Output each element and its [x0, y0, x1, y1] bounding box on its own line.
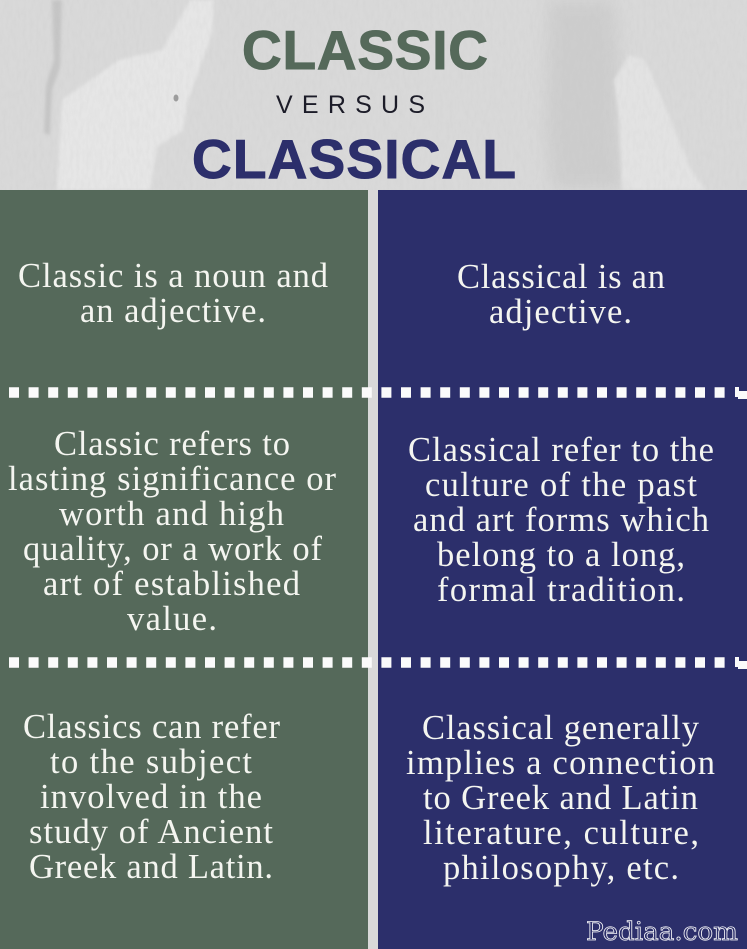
text: classics subject: Classics can refer — [23, 708, 280, 746]
text: classical meaning: formal tradition. — [437, 571, 685, 609]
text: classics subject — [23, 708, 280, 886]
text: classics subject: to the subject — [50, 743, 252, 781]
panel: classical column — [378, 190, 747, 949]
text: classical connection: philosophy, etc. — [443, 849, 679, 887]
text: classical meaning: and art forms which — [413, 501, 709, 539]
subtitle: VERSUS: VERSUS — [276, 91, 425, 119]
title: CLASSIC: CLASSIC — [242, 19, 488, 81]
text: classical connection: literature, culture, — [423, 814, 699, 852]
text: classic meaning: worth and high — [59, 495, 284, 533]
text: classical meaning: culture of the past — [425, 466, 697, 504]
text: classic meaning: value. — [127, 600, 217, 638]
text: classic part of speech: Classic is a noun and — [18, 257, 328, 295]
text: classical connection: Classical generally — [422, 709, 700, 747]
text: classical connection — [406, 709, 715, 887]
text: classical meaning: Classical refer to the — [408, 431, 714, 469]
text: classical meaning: belong to a long, — [437, 536, 685, 574]
text: classical connection: to Greek and Latin — [423, 779, 698, 817]
text: classic part of speech: an adjective. — [80, 292, 266, 330]
text: classic meaning: Classic refers to — [54, 425, 290, 463]
text: classics subject: involved in the — [40, 778, 262, 816]
divider: dotted row two — [9, 657, 747, 669]
text: classics subject: Greek and Latin. — [29, 848, 273, 886]
text: classic meaning: art of established — [43, 565, 300, 603]
watermark: Pediaa.com: Pediaa.com — [586, 917, 738, 946]
text: classics subject: study of Ancient — [29, 813, 273, 851]
text: classical meaning — [408, 431, 714, 609]
text: classical part of speech: adjective. — [489, 293, 632, 331]
text: classical connection: implies a connection — [406, 744, 715, 782]
title: CLASSICAL: CLASSICAL — [192, 128, 516, 190]
text: classic meaning: quality, or a work of — [23, 530, 322, 568]
divider: dotted row one — [9, 387, 747, 399]
panel: classic column — [0, 190, 368, 949]
text: classical part of speech — [457, 258, 665, 331]
text: classic meaning — [8, 425, 336, 638]
text: classic part of speech — [18, 257, 328, 330]
text: classical part of speech: Classical is an — [457, 258, 665, 296]
text: classic meaning: lasting significance or — [8, 460, 336, 498]
